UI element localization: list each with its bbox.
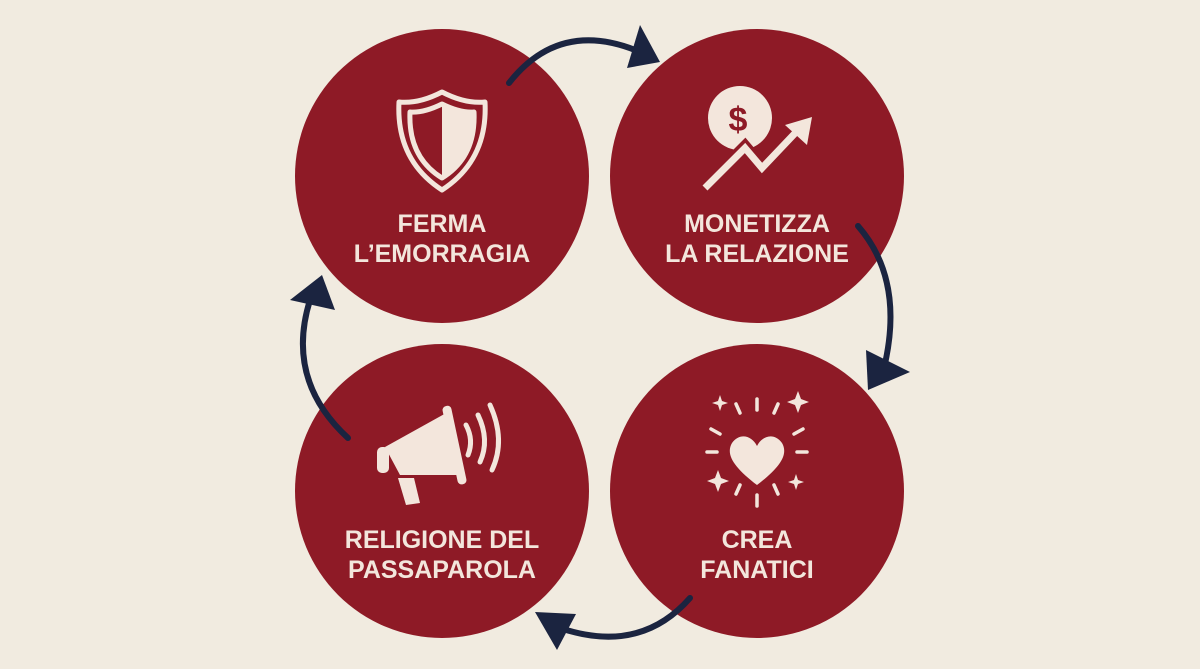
icon: heart with sparkles: [707, 391, 809, 506]
arrow: top: [509, 25, 660, 83]
icon: megaphone: [377, 405, 499, 505]
heading: religione del: RELIGIONE DEL: [345, 526, 539, 554]
heading: emorragia: L’EMORRAGIA: [354, 240, 530, 268]
icon: money growth: [705, 86, 812, 188]
panel: monetizza la relazione: [610, 29, 904, 323]
arrow: right: [858, 226, 910, 390]
arrow: left: [290, 275, 348, 438]
heading: la relazione: LA RELAZIONE: [665, 240, 849, 268]
panel: religione del passaparola: [295, 344, 589, 638]
heading: monetizza: MONETIZZA: [684, 210, 830, 238]
icon: money growth: $: [729, 101, 748, 139]
heading: crea: CREA: [722, 526, 792, 554]
heading: passaparola: PASSAPAROLA: [348, 556, 536, 584]
heading: ferma: FERMA: [398, 210, 486, 238]
panel: ferma l'emorragia: [295, 29, 589, 323]
arrow: bottom: [535, 598, 690, 650]
icon: shield: [399, 92, 485, 190]
heading: fanatici: FANATICI: [700, 556, 814, 584]
panel: crea fanatici: [610, 344, 904, 638]
